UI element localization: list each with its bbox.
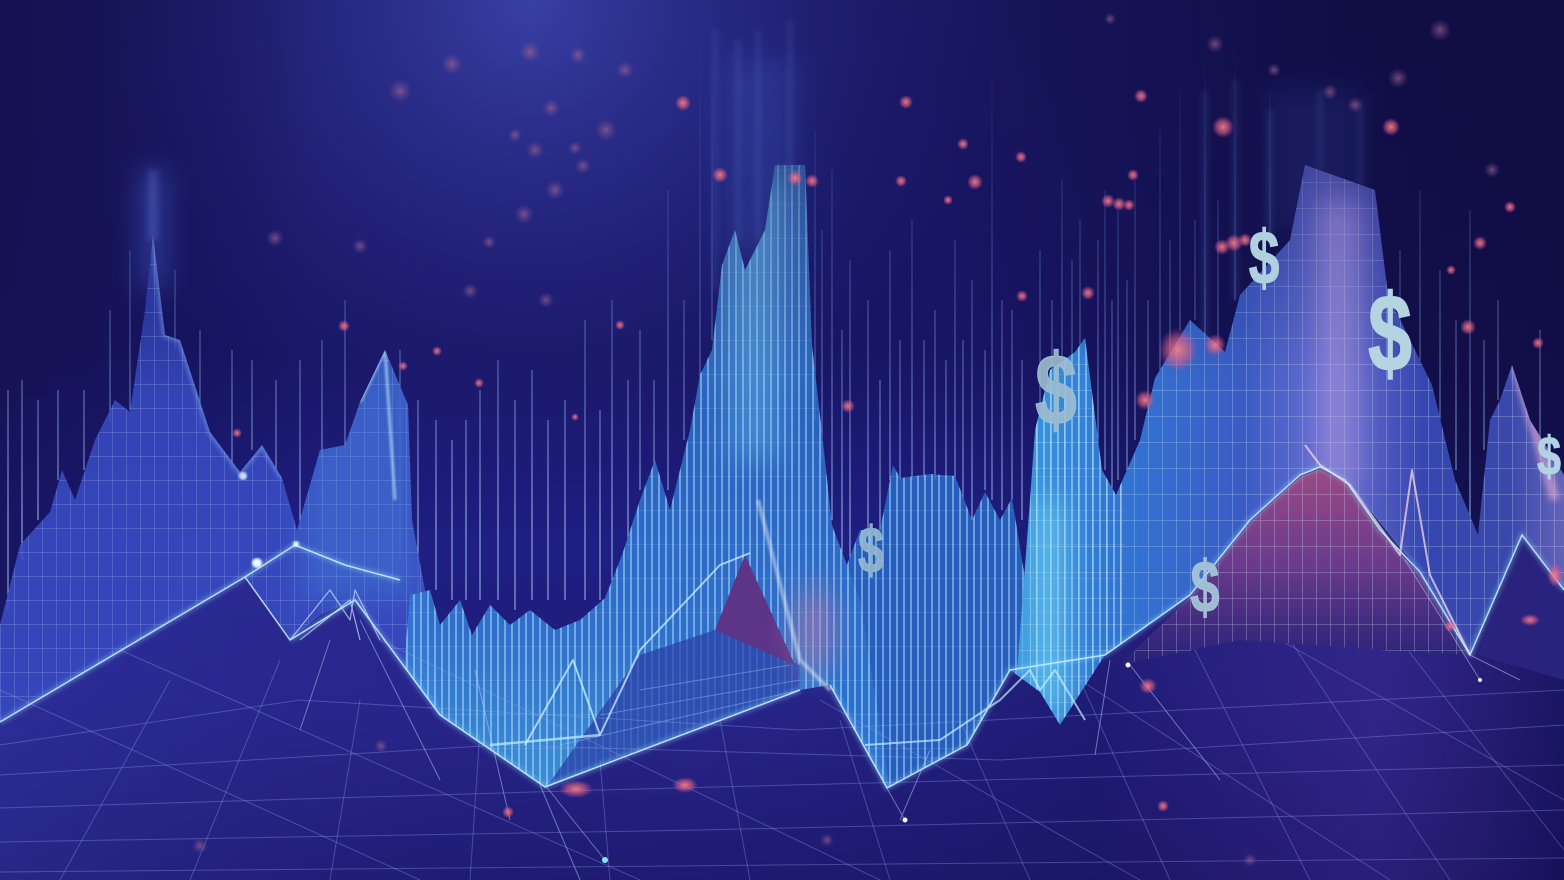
blurred wide streak bands bbox=[153, 20, 1360, 340]
dollar sign: far right edge: $ bbox=[1537, 426, 1561, 487]
comb-shaped spikes between the peaks bbox=[826, 465, 1024, 787]
floor perspective grid bbox=[0, 620, 1564, 880]
soft light columns above the peaks bbox=[142, 60, 1360, 290]
pink glow under right summit bbox=[1120, 469, 1466, 665]
centre mountain wireframe bbox=[400, 160, 900, 800]
glowing orange particles bbox=[232, 89, 1544, 438]
rising vertical light streaks bbox=[8, 30, 1540, 610]
dollar sign: large centre right: $ bbox=[1035, 333, 1077, 445]
pink glow under centre summit bbox=[715, 555, 795, 665]
glowing ridge line bbox=[0, 445, 1564, 788]
mesh panel below centre summit bbox=[548, 630, 800, 785]
dollar sign: large right: $ bbox=[1368, 272, 1412, 395]
far right dark summit bbox=[1478, 535, 1564, 680]
mesh panel lines bbox=[560, 665, 800, 745]
floor particles bbox=[192, 563, 1563, 867]
dollar sign: ridge left: $ bbox=[858, 515, 884, 587]
thin floor filaments bbox=[300, 560, 1520, 880]
dollar sign: on ridge: $ bbox=[1190, 547, 1220, 628]
upper particles bbox=[266, 13, 1500, 308]
glints on the ridge bbox=[239, 472, 299, 568]
pink haze right of centre summit bbox=[793, 585, 837, 675]
floor base below the ridge bbox=[0, 467, 1564, 880]
dollar sign: upper summit: $ bbox=[1249, 217, 1279, 301]
left mountain wireframe bbox=[0, 220, 450, 740]
right mountain wireframe bbox=[1010, 160, 1564, 740]
